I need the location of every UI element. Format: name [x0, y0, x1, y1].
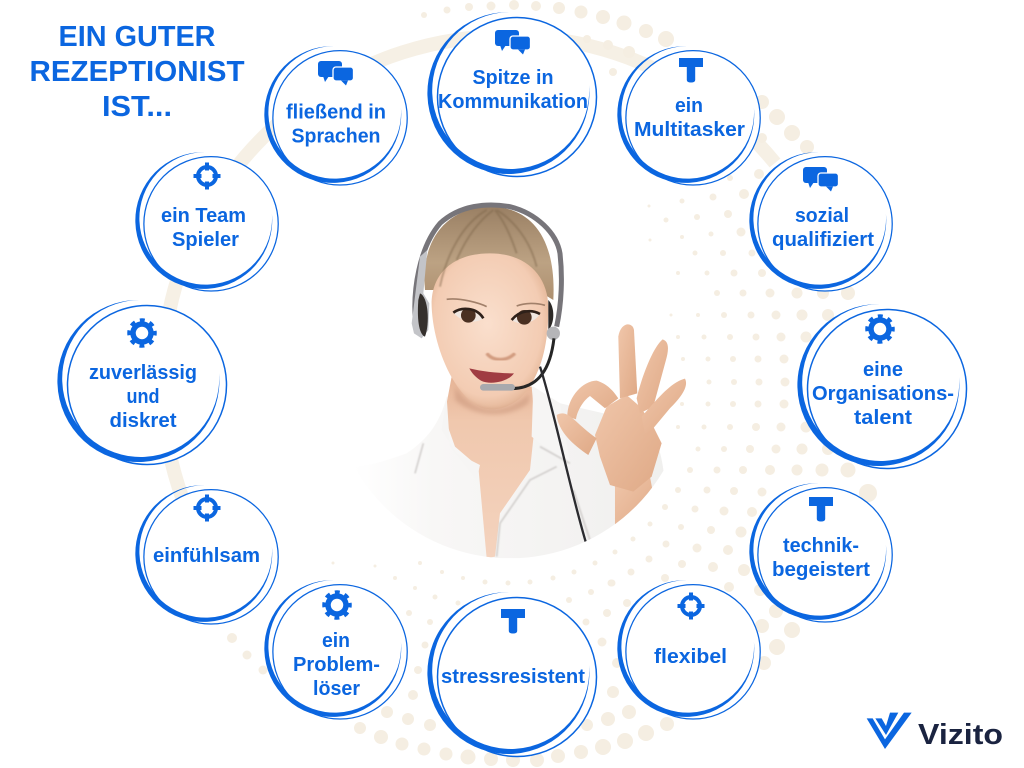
- icon: speech bubbles: [803, 167, 838, 192]
- text: Sprachen: [292, 126, 380, 148]
- collar: [446, 399, 535, 471]
- icon: V check mark: [867, 713, 912, 749]
- text: [286, 102, 386, 148]
- earcup left: [412, 250, 429, 338]
- text: ein: [675, 95, 703, 117]
- icon: gear: [130, 320, 154, 346]
- cable: [540, 367, 587, 545]
- face: [432, 253, 548, 409]
- icon: tool: [679, 58, 703, 82]
- text: stressresistent: [441, 666, 585, 688]
- circle: einfühlsam: [135, 485, 278, 624]
- icon: crosshair: [194, 494, 220, 522]
- text: flexibel: [654, 646, 727, 668]
- text: zuverlässig: [89, 362, 197, 384]
- circle: stressresistent: [427, 592, 596, 756]
- text: und: [126, 386, 160, 408]
- text: [438, 67, 588, 113]
- text: Problem-: [293, 654, 380, 676]
- text: ein Team: [161, 205, 246, 227]
- circle: sozial qualifiziert: [749, 152, 892, 291]
- title: [30, 21, 245, 123]
- circle: zuverlässig und diskret: [57, 300, 226, 464]
- background: halftone dots: [227, 0, 877, 767]
- title: IST...: [102, 91, 172, 123]
- icon: speech bubbles: [495, 30, 530, 54]
- photo: receptionist with headset: [412, 202, 686, 558]
- text: Organisations-: [812, 383, 954, 405]
- text: [812, 359, 954, 429]
- circle: Spitze in Kommunikation: [427, 12, 596, 177]
- text: [772, 205, 874, 251]
- text: technik-: [783, 535, 859, 557]
- text: qualifiziert: [772, 229, 874, 251]
- blouse: [425, 387, 664, 558]
- icon: tool: [809, 497, 833, 522]
- nose shadow: [487, 353, 515, 360]
- text: [293, 630, 380, 700]
- circle: ein Multitasker: [617, 46, 760, 185]
- text: sozial: [795, 205, 849, 227]
- text: [772, 535, 870, 581]
- title: REZEPTIONIST: [30, 56, 245, 88]
- icon: speech bubbles: [318, 61, 354, 86]
- icon: crosshair: [678, 592, 704, 620]
- text: Spitze in: [472, 67, 554, 89]
- circle: eine Organisationstalent: [797, 304, 966, 468]
- icon: gear: [324, 592, 350, 618]
- background: beige ring: [162, 36, 775, 600]
- text: [161, 205, 246, 251]
- neck shadow: [455, 387, 530, 414]
- text: [89, 362, 197, 432]
- text: [634, 95, 745, 141]
- text: Multitasker: [634, 119, 745, 141]
- text: ein: [322, 630, 350, 652]
- lips: [469, 368, 514, 383]
- headband: [415, 205, 561, 327]
- logo text: Vizito: [918, 719, 1003, 751]
- text: eine: [863, 359, 903, 381]
- earcup right: [548, 300, 553, 330]
- text: Spieler: [172, 229, 239, 251]
- circle: flexibel: [617, 580, 760, 719]
- hair strands: [440, 210, 537, 287]
- hair back: [424, 207, 554, 300]
- hand: [557, 324, 686, 528]
- circle: ein Problemlöser: [264, 580, 407, 719]
- icon: tool: [501, 609, 525, 634]
- icon: crosshair: [194, 162, 220, 190]
- title: EIN GUTER: [58, 21, 216, 53]
- text: begeistert: [772, 559, 870, 581]
- text: fließend in: [286, 102, 386, 124]
- eyes and brows: [447, 299, 545, 325]
- chest skin: [447, 377, 535, 558]
- circle: technikbegeistert: [749, 483, 892, 622]
- text: einfühlsam: [153, 545, 260, 567]
- text: Kommunikation: [438, 91, 588, 113]
- circle: fließend in Sprachen: [264, 46, 407, 185]
- icon: gear: [868, 316, 892, 342]
- text: löser: [313, 678, 360, 700]
- logo: Vizito: [867, 713, 1003, 751]
- mic boom: [512, 338, 554, 389]
- text: talent: [854, 407, 912, 429]
- text: diskret: [110, 410, 177, 432]
- blouse folds: [415, 443, 593, 557]
- circle: ein Team Spieler: [135, 152, 278, 291]
